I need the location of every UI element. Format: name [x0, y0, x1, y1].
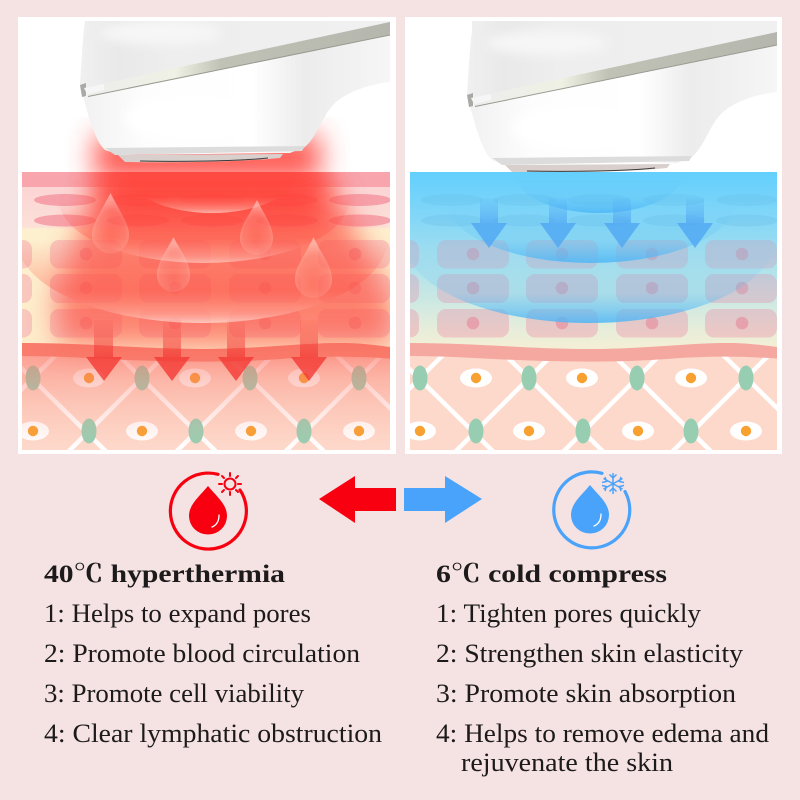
icon: hot blood drop with sun — [170, 473, 246, 549]
text block: hyperthermia benefits: 1: Helps to expand pores — [44, 599, 311, 628]
downward arrows hot — [86, 320, 327, 381]
text block: hyperthermia benefits: 4: Clear lymphatic obstruction — [44, 719, 382, 748]
text block: hyperthermia benefits: 2: Promote blood circulation — [44, 639, 360, 668]
skin cross section right — [410, 172, 777, 450]
text block: hyperthermia benefits — [44, 561, 382, 748]
text block: cold compress benefits: 2: Strengthen skin elasticity — [436, 639, 743, 668]
panel frame right — [405, 17, 782, 454]
icon: cold water drop with snowflake — [554, 472, 630, 548]
heat glow — [55, 165, 392, 345]
device right — [467, 21, 777, 172]
device left — [80, 21, 390, 162]
panel frame left — [18, 17, 396, 454]
text block: hyperthermia benefits: 3: Promote cell viability — [44, 679, 304, 708]
panel: cold treatment — [405, 17, 782, 454]
arrow: left red — [319, 476, 396, 523]
heat glow beneath device — [95, 135, 320, 180]
heading: hyperthermia: 40℃ hyperthermia — [44, 561, 286, 588]
heading: cold compress: 6℃ cold compress — [436, 561, 667, 588]
text block: cold compress benefits: 4: Helps to remove edema and — [436, 719, 769, 748]
panel: hot treatment — [18, 17, 396, 454]
arrow: right blue — [404, 476, 482, 523]
water drops — [92, 193, 332, 298]
text block: cold compress benefits: 1: Tighten pores quickly — [436, 599, 701, 628]
skin cross section left — [22, 172, 390, 450]
text block: cold compress benefits — [436, 561, 769, 777]
downward arrows cold — [471, 198, 713, 248]
text block: cold compress benefits: 3: Promote skin absorption — [436, 679, 736, 708]
text block: cold compress benefits: rejuvenate the skin — [461, 748, 673, 777]
